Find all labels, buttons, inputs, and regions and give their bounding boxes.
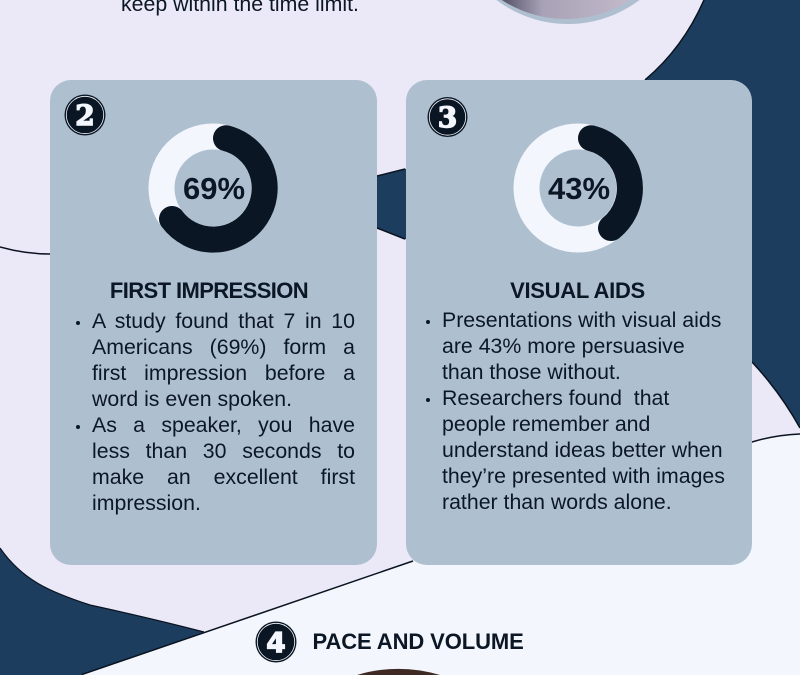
badge: number 2: 2 [75, 99, 95, 132]
bullet list: Researchers found that [442, 386, 669, 410]
bullet list: less than 30 seconds to [92, 439, 355, 463]
section header: pace and volume [256, 622, 524, 662]
bullet list: Americans (69%) form a [92, 335, 355, 359]
bullet list: make an excellent first [92, 465, 355, 489]
photo: bottom speaker (cropped circle) [357, 668, 440, 675]
badge: number 3 [428, 97, 468, 137]
bullet list: are 43% more persuasive [442, 334, 685, 358]
heading: VISUAL AIDS [510, 278, 645, 303]
panel: first impression [50, 80, 377, 565]
value: 43% [548, 171, 610, 206]
photo: top speaker (cropped circle) [496, 0, 640, 24]
bullet list: word is even spoken. [92, 387, 292, 411]
bullet list: first impression before a [92, 361, 355, 385]
bullet list: they’re presented with images [442, 464, 725, 488]
donut chart: 43% [514, 124, 643, 252]
badge: number 2 [64, 94, 106, 136]
heading: PACE AND VOLUME [312, 629, 524, 654]
heading: FIRST IMPRESSION [110, 278, 308, 303]
badge: number 3: 3 [437, 101, 457, 134]
donut chart: 69% [148, 124, 278, 253]
bullet list: than those without. [442, 360, 621, 384]
bullet list: Presentations with visual aids [442, 308, 721, 332]
bullet list: people remember and [442, 412, 650, 436]
bullet list: impression. [92, 491, 201, 515]
bullet list [76, 309, 355, 515]
bullet list [426, 308, 725, 514]
badge: number 4 [256, 622, 296, 662]
badge: number 4: 4 [266, 626, 286, 659]
bullet list: rather than words alone. [442, 490, 672, 514]
value: 69% [183, 171, 245, 206]
bullet list: As a speaker, you have [92, 413, 355, 437]
bullet list: understand ideas better when [442, 438, 723, 462]
panel: visual aids [406, 80, 752, 565]
bullet list: A study found that 7 in 10 [92, 309, 355, 333]
